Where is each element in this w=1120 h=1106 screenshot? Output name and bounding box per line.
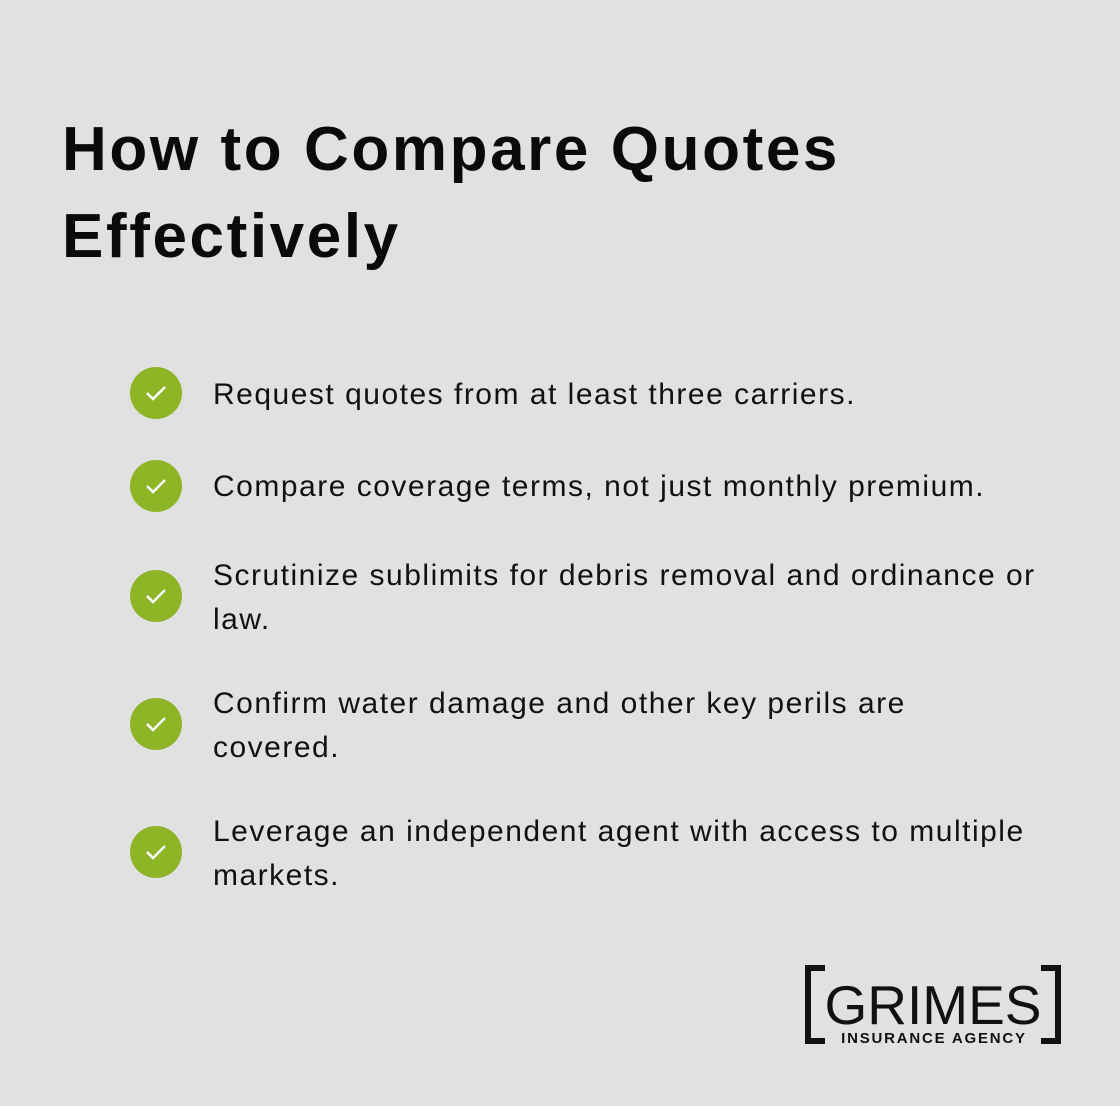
item 1 bbox=[130, 367, 856, 419]
icon: check bbox=[130, 570, 182, 622]
title: How to Compare Quotes bbox=[62, 115, 840, 184]
logo bbox=[805, 965, 1061, 1047]
logo wordmark: GRIMES bbox=[825, 974, 1041, 1036]
icon: check bbox=[130, 826, 182, 878]
text 3: Scrutinize sublimits for debris removal and ordinance or law. bbox=[213, 559, 1036, 636]
item 4 bbox=[130, 687, 906, 764]
icon: check bbox=[130, 367, 182, 419]
item 3 bbox=[130, 559, 1036, 636]
text 4: Confirm water damage and other key perils are covered. bbox=[213, 687, 906, 764]
left bracket bbox=[805, 965, 811, 1044]
item 5 bbox=[130, 815, 1025, 892]
text 2: Compare coverage terms, not just monthly premium. bbox=[213, 470, 985, 503]
item 2 bbox=[130, 460, 985, 512]
title bbox=[62, 115, 840, 271]
title: Effectively bbox=[62, 202, 401, 271]
logo subtitle: INSURANCE AGENCY bbox=[841, 1030, 1027, 1047]
icon: check bbox=[130, 698, 182, 750]
text 1: Request quotes from at least three carriers. bbox=[213, 378, 856, 411]
right bracket bbox=[1055, 965, 1061, 1044]
text 5: Leverage an independent agent with access to multiple markets. bbox=[213, 815, 1025, 892]
icon: check bbox=[130, 460, 182, 512]
